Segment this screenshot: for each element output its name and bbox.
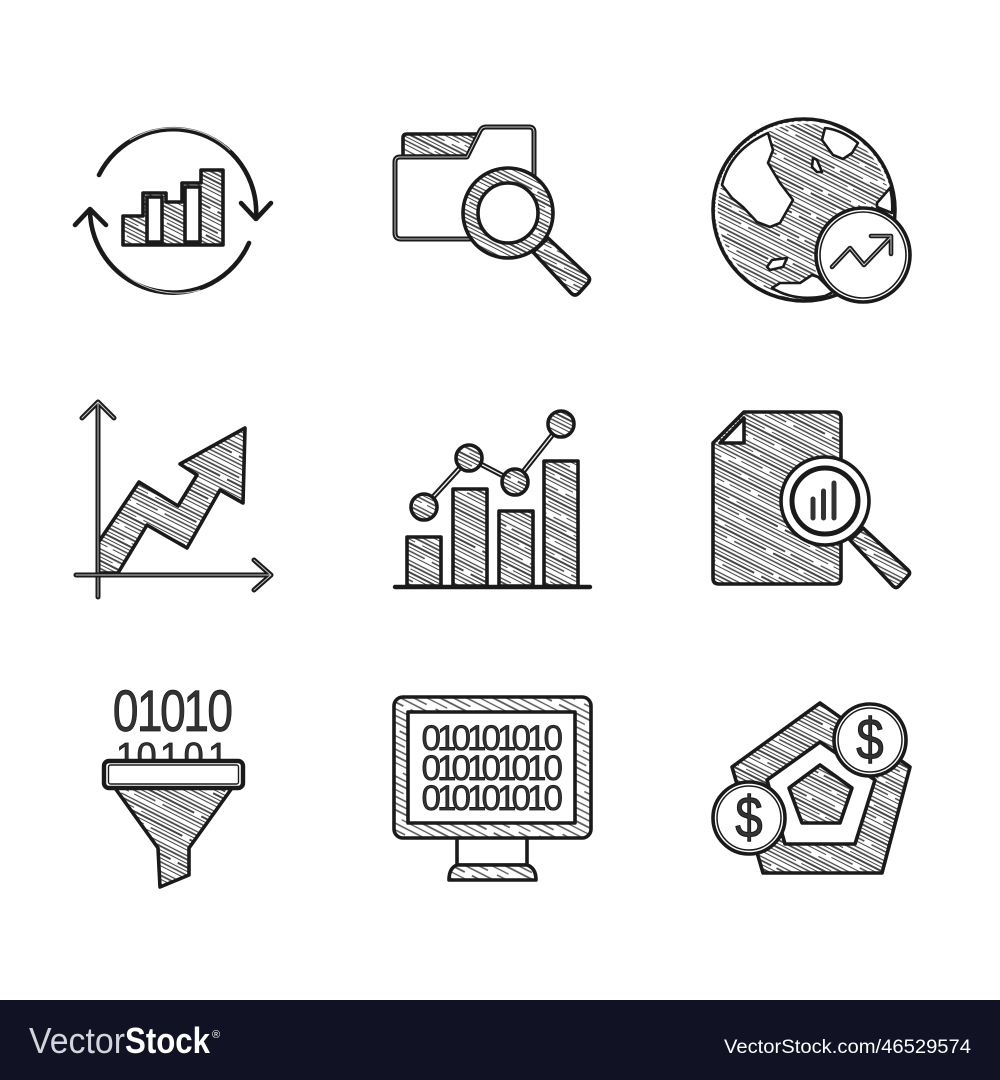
funnel cone xyxy=(115,788,232,887)
folder body xyxy=(395,127,534,239)
icon: growth arrow on axes xyxy=(76,402,271,597)
globe xyxy=(713,119,895,301)
stand xyxy=(457,838,527,865)
footer logo: ® xyxy=(212,1029,220,1041)
growth badge xyxy=(816,208,910,302)
trend line xyxy=(411,411,574,520)
magnifier handle xyxy=(533,238,590,295)
magnifier lens xyxy=(463,168,553,258)
icon: refresh cycle with bar chart xyxy=(75,128,271,293)
footer image id: VectorStock.com/46529574 xyxy=(724,1037,971,1058)
icon: binary data funnel xyxy=(104,679,243,887)
vertical axis xyxy=(82,402,114,597)
coin bottom left xyxy=(713,782,785,854)
monitor frame xyxy=(394,697,591,838)
baseline xyxy=(395,585,590,589)
icon: folder with magnifying glass xyxy=(395,127,590,295)
icon: computer monitor with binary code xyxy=(394,697,591,880)
footer logo xyxy=(29,1020,220,1061)
icon: bar chart with trend line xyxy=(395,411,590,587)
binary code xyxy=(422,719,563,818)
coin top right xyxy=(834,704,906,776)
outer pentagon ring xyxy=(732,703,910,873)
page fold xyxy=(720,418,744,443)
stepped bar chart xyxy=(123,170,223,245)
stand base xyxy=(449,865,536,880)
horizontal axis xyxy=(76,560,271,590)
circular arrows xyxy=(75,128,271,293)
screen xyxy=(408,712,575,823)
icon: pentagon with dollar coins xyxy=(713,703,910,873)
continents xyxy=(722,128,892,298)
bars xyxy=(407,461,578,586)
footer logo: Stock xyxy=(125,1020,211,1061)
binary code: 010101010 xyxy=(422,779,563,818)
magnifier lens xyxy=(781,457,869,545)
trend arrow xyxy=(832,236,891,267)
document xyxy=(713,412,841,584)
binary digits row: 01010 xyxy=(113,679,233,744)
coin bottom left: $ xyxy=(735,785,763,850)
binary code: 010101010 xyxy=(422,719,563,758)
footer logo: Vector xyxy=(29,1020,125,1061)
folder tab xyxy=(403,134,478,156)
icon: globe with growth arrow xyxy=(713,119,910,302)
clipped digits row: 10101 xyxy=(116,735,228,776)
footer bar xyxy=(0,1000,1000,1080)
center pentagon xyxy=(789,765,852,823)
binary code: 010101010 xyxy=(422,749,563,788)
coin top right: $ xyxy=(856,707,884,772)
icon: document with magnifier xyxy=(713,412,910,588)
zigzag arrow xyxy=(98,428,245,573)
magnifier handle xyxy=(850,528,910,588)
funnel rim xyxy=(104,761,243,788)
